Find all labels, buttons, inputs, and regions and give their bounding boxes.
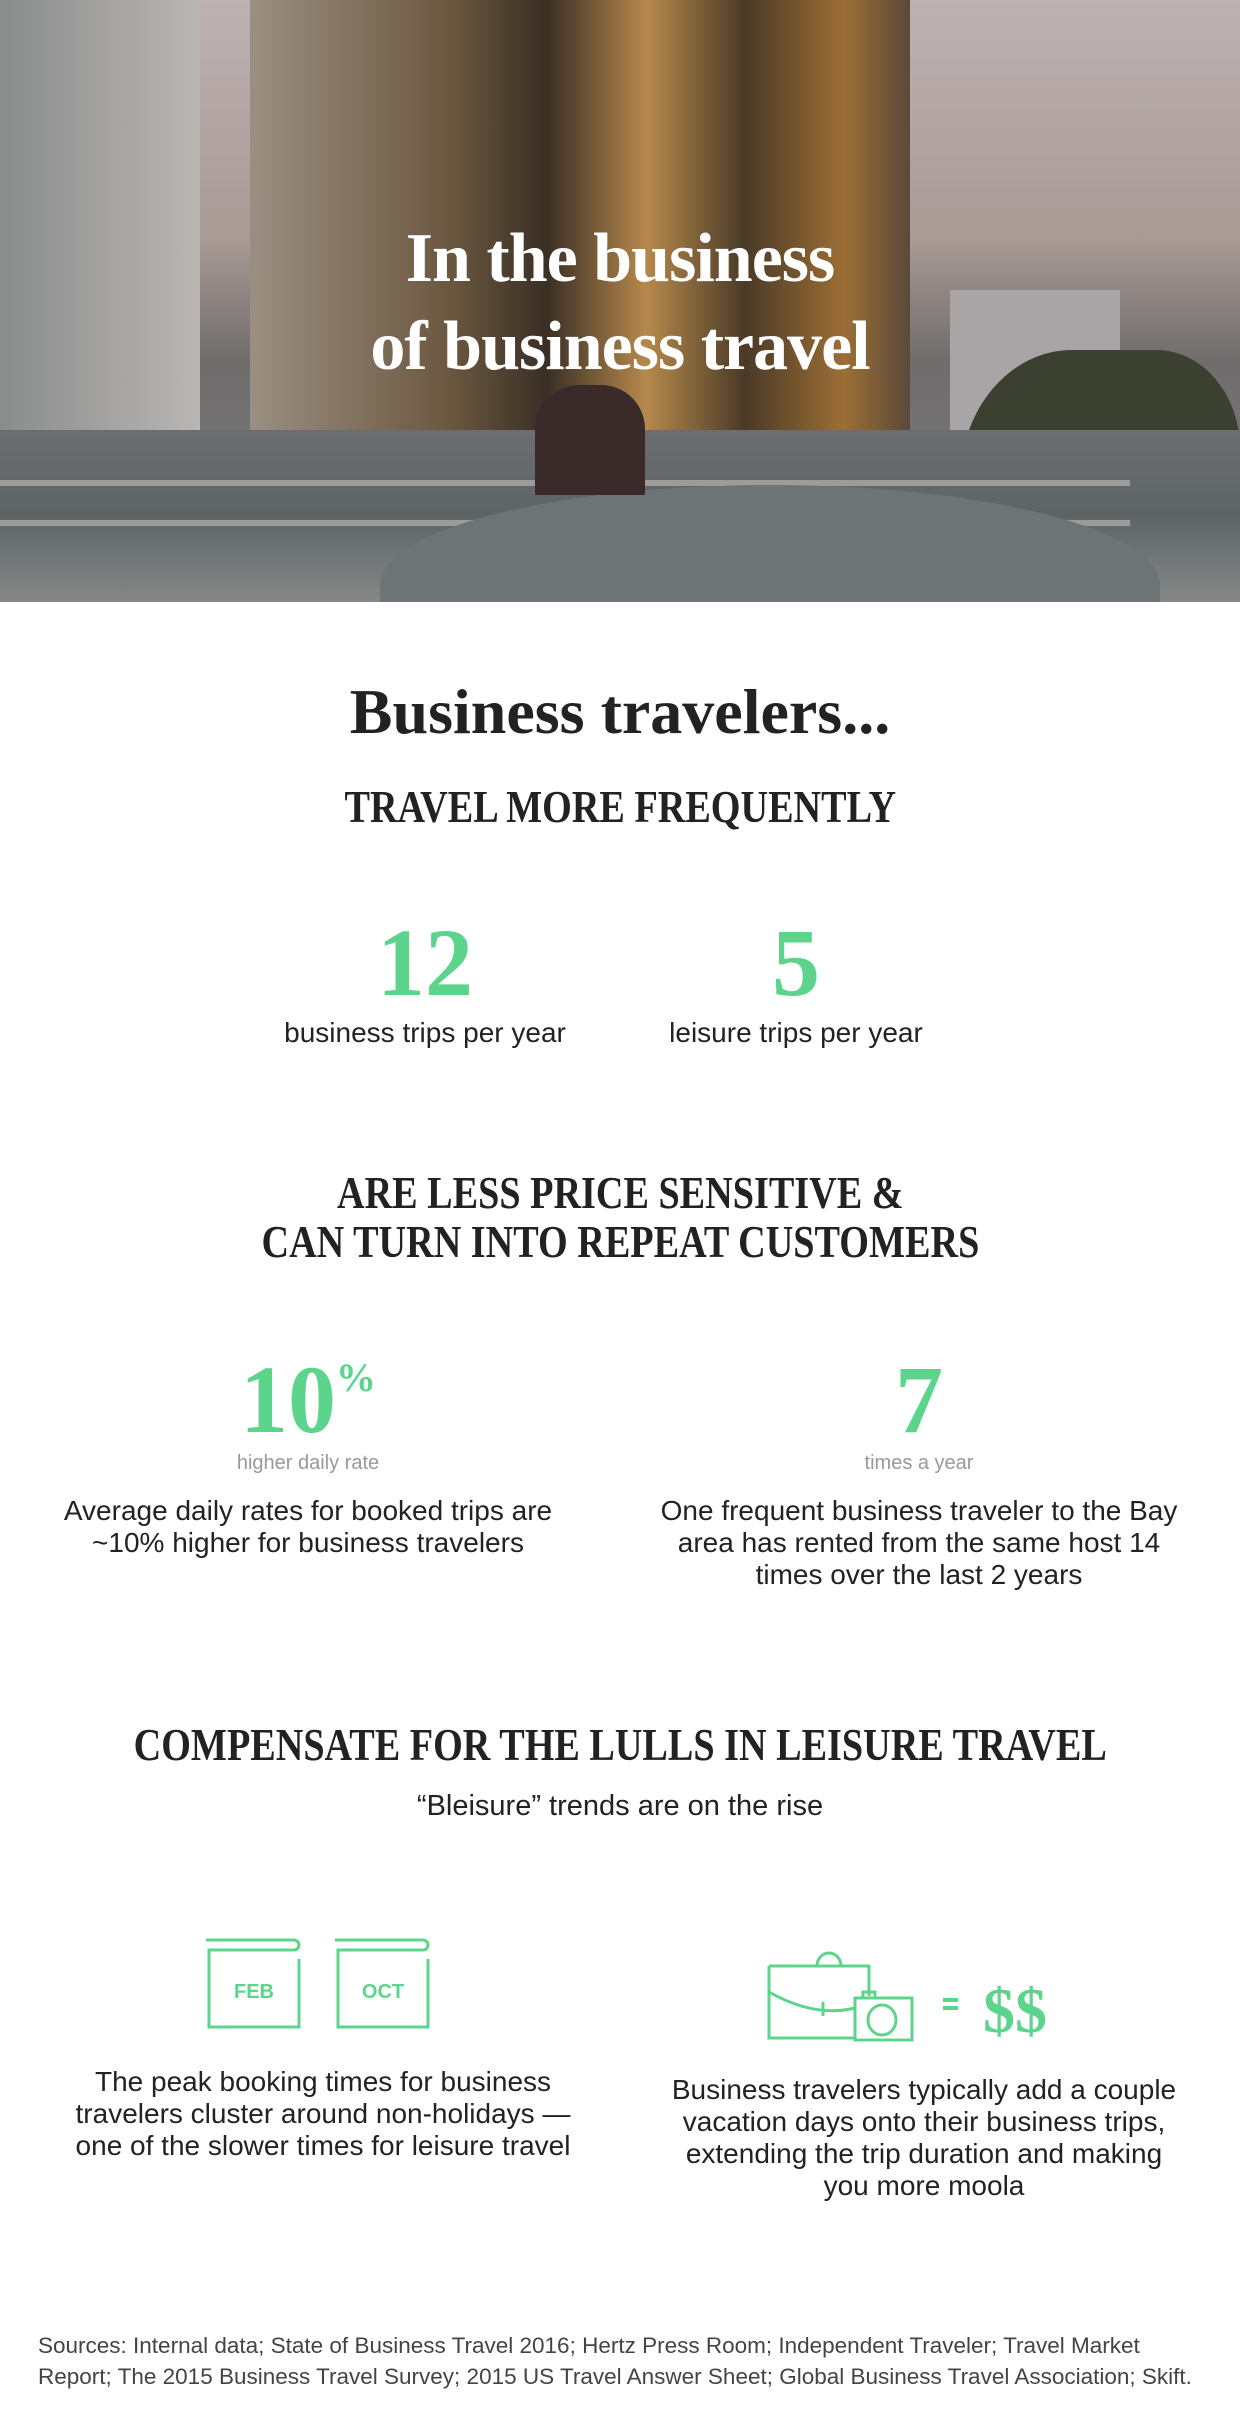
sources: Sources: Internal data; State of Business Travel 2016; Hertz Press Room; Independent Traveler; Travel Market (38, 2333, 1140, 2358)
stat: 7 times a year: times over the last 2 years (756, 1559, 1082, 1590)
stat: 5 leisure trips (669, 909, 923, 1048)
text: peak booking: The peak booking times for business (95, 2066, 551, 2097)
stat: 10% higher daily rate (64, 1346, 552, 1558)
sources: Report; The 2015 Business Travel Survey; 2015 US Travel Answer Sheet; Global Business Travel Association; Skift. (38, 2364, 1192, 2389)
stat: 10% higher daily rate: Average daily rates for booked trips are (64, 1495, 552, 1526)
stat: 12 business trips: business trips per year (284, 1017, 566, 1048)
icon: briefcase camera = $$ (768, 1952, 1047, 2045)
section 3 heading: COMPENSATE FOR THE LULLS IN LEISURE TRAVEL (133, 1719, 1107, 1770)
stat: 12 business trips: 12 (377, 909, 473, 1016)
text: bleisure extension: you more moola (824, 2170, 1024, 2201)
section 2 heading: CAN TURN INTO REPEAT CUSTOMERS (261, 1216, 979, 1267)
stat: 10% higher daily rate: ~10% higher for business travelers (92, 1527, 524, 1558)
text: bleisure extension: extending the trip duration and making (686, 2138, 1162, 2169)
subheading bleisure: “Bleisure” trends are on the rise (417, 1790, 823, 1822)
stat: 7 times a year: One frequent business traveler to the Bay (661, 1495, 1177, 1526)
text: peak booking (76, 2066, 570, 2161)
stat: 7 times a year: times a year (865, 1452, 973, 1474)
text: peak booking: one of the slower times for leisure travel (76, 2130, 570, 2161)
stat: 7 times a year: 7 (895, 1346, 943, 1453)
stat: 7 times a year: area has rented from the same host 14 (678, 1527, 1160, 1558)
stat: 5 leisure trips: 5 (772, 909, 820, 1016)
hero title: In the business (406, 220, 834, 297)
icon: calendars FEB OCT: FEB (234, 1981, 274, 2003)
text: bleisure extension (672, 2074, 1176, 2201)
text: bleisure extension: Business travelers typically add a couple (672, 2074, 1176, 2105)
hero title: of business travel (370, 308, 870, 385)
stat: 7 times a year (661, 1346, 1178, 1590)
stat: 12 business trips (284, 909, 566, 1048)
stat: 10% higher daily rate: 10% (240, 1346, 376, 1453)
icon: briefcase camera = $$: $$ (983, 1975, 1047, 2045)
stat: 10% higher daily rate: higher daily rate (237, 1452, 379, 1474)
section 1 heading: TRAVEL MORE FREQUENTLY (344, 781, 896, 832)
text: bleisure extension: vacation days onto their business trips, (683, 2106, 1165, 2137)
icon: calendars FEB OCT: OCT (362, 1981, 404, 2003)
hero title (370, 220, 870, 385)
hero photo (0, 0, 1240, 602)
text: peak booking: travelers cluster around non-holidays — (76, 2098, 570, 2129)
section 2 heading (261, 1167, 979, 1267)
icon: calendars FEB OCT (206, 1938, 430, 2028)
heading: business travelers: Business travelers... (350, 676, 890, 747)
section 2 heading: ARE LESS PRICE SENSITIVE & (337, 1167, 903, 1218)
stat: 5 leisure trips: leisure trips per year (669, 1017, 923, 1048)
sources (38, 2333, 1192, 2389)
